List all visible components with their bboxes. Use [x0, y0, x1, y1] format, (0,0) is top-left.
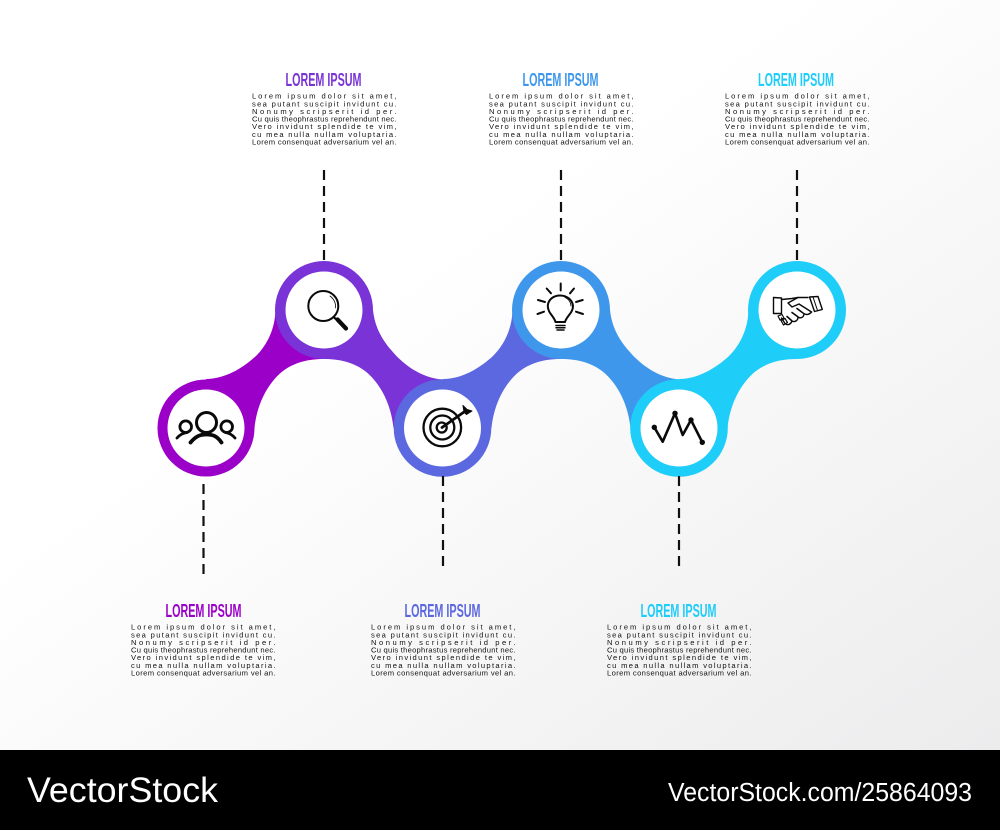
dashed leader 1: [202, 484, 205, 574]
body copy: sea putant suscipit invidunt cu.: [607, 630, 752, 639]
body copy: Nonumy scripserit id per.: [252, 107, 396, 116]
text block: step 5: [607, 600, 752, 678]
body copy: Vero invidunt splendide te vim,: [252, 122, 396, 131]
icon: downward peaks line: [652, 411, 705, 445]
body copy: Lorem consenquat adversarium vel an.: [489, 138, 634, 146]
footer brand: VectorStock: [27, 771, 219, 810]
body copy: Nonumy scripserit id per.: [607, 638, 752, 647]
step 4 ring: [512, 261, 610, 359]
step 2 ring: [275, 261, 373, 359]
body copy: cu mea nulla nullam voluptaria.: [489, 130, 634, 139]
body copy: Lorem ipsum dolor sit amet,: [489, 92, 634, 101]
body copy: Lorem ipsum dolor sit amet,: [252, 92, 396, 101]
step 5 ring: [630, 379, 728, 477]
dashed leader 2: [323, 170, 325, 260]
icon: magnifier: [308, 291, 346, 328]
body copy: Lorem ipsum dolor sit amet,: [371, 623, 516, 632]
body copy: cu mea nulla nullam voluptaria.: [131, 661, 276, 670]
body copy: Vero invidunt splendide te vim,: [489, 122, 634, 131]
body copy: Cu quis theophrastus reprehendunt nec.: [371, 646, 516, 655]
body copy: [252, 92, 396, 146]
icon: handshake: [774, 296, 822, 325]
step 6 ring: [748, 261, 846, 359]
body copy: Vero invidunt splendide te vim,: [725, 122, 870, 131]
timeline ribbon: [158, 261, 846, 477]
text block: step 4: [489, 69, 634, 146]
body copy: Vero invidunt splendide te vim,: [371, 653, 516, 662]
icon: light bulb: [538, 284, 583, 330]
body copy: Lorem consenquat adversarium vel an.: [607, 668, 752, 678]
body copy: [607, 623, 752, 678]
body copy: sea putant suscipit invidunt cu.: [489, 99, 634, 108]
body copy: Vero invidunt splendide te vim,: [131, 653, 276, 662]
footer image id: VectorStock.com/25864093: [668, 779, 972, 807]
body copy: sea putant suscipit invidunt cu.: [725, 99, 870, 108]
body copy: [131, 623, 276, 678]
body copy: Lorem ipsum dolor sit amet,: [131, 623, 276, 632]
body copy: Lorem consenquat adversarium vel an.: [725, 138, 870, 146]
body copy: Lorem consenquat adversarium vel an.: [131, 668, 276, 678]
body copy: sea putant suscipit invidunt cu.: [252, 99, 396, 108]
dashed leader 3: [442, 476, 444, 566]
body copy: Lorem consenquat adversarium vel an.: [371, 668, 516, 678]
step 1 ring: [158, 380, 254, 476]
connector 4 to 5: [561, 310, 680, 428]
body copy: [371, 623, 516, 678]
body copy: Cu quis theophrastus reprehendunt nec.: [725, 115, 870, 124]
body copy: cu mea nulla nullam voluptaria.: [607, 661, 752, 670]
icon: target with arrow: [424, 406, 472, 446]
body copy: sea putant suscipit invidunt cu.: [371, 630, 516, 639]
connector 3 to 4: [443, 310, 561, 428]
body copy: Lorem consenquat adversarium vel an.: [252, 138, 396, 146]
body copy: Nonumy scripserit id per.: [131, 638, 276, 647]
heading: LOREM IPSUM: [286, 69, 362, 90]
heading: LOREM IPSUM: [166, 600, 242, 621]
body copy: cu mea nulla nullam voluptaria.: [252, 130, 396, 139]
heading: LOREM IPSUM: [758, 69, 834, 90]
body copy: cu mea nulla nullam voluptaria.: [371, 661, 516, 670]
body copy: Vero invidunt splendide te vim,: [607, 653, 752, 662]
heading: LOREM IPSUM: [640, 600, 716, 621]
body copy: [489, 92, 634, 146]
text block: step 6: [725, 69, 870, 146]
connector 2 to 3: [324, 310, 443, 428]
body copy: Cu quis theophrastus reprehendunt nec.: [489, 115, 634, 124]
body copy: Cu quis theophrastus reprehendunt nec.: [607, 646, 752, 655]
connector 1 to 2: [206, 310, 324, 428]
body copy: sea putant suscipit invidunt cu.: [131, 630, 276, 639]
text block: step 1: [131, 600, 276, 678]
body copy: Cu quis theophrastus reprehendunt nec.: [252, 115, 396, 124]
body copy: Nonumy scripserit id per.: [371, 638, 516, 647]
body copy: Cu quis theophrastus reprehendunt nec.: [131, 646, 276, 655]
body copy: Lorem ipsum dolor sit amet,: [607, 623, 752, 632]
step 3 ring: [394, 379, 491, 477]
dashed leader 5: [678, 476, 680, 566]
connector 5 to 6: [679, 310, 797, 428]
icon: people: [177, 412, 235, 442]
white discs: [168, 272, 836, 466]
dashed leader 6: [796, 170, 798, 260]
body copy: Nonumy scripserit id per.: [725, 107, 870, 116]
body copy: cu mea nulla nullam voluptaria.: [725, 130, 870, 139]
body copy: Nonumy scripserit id per.: [489, 107, 634, 116]
text block: step 3: [371, 600, 516, 678]
heading: LOREM IPSUM: [404, 600, 480, 621]
text block: step 2: [252, 69, 396, 146]
footer bar: [0, 750, 1000, 830]
dashed leader 4: [560, 170, 562, 260]
body copy: Lorem ipsum dolor sit amet,: [725, 92, 870, 101]
heading: LOREM IPSUM: [522, 69, 598, 90]
body copy: [725, 92, 870, 146]
